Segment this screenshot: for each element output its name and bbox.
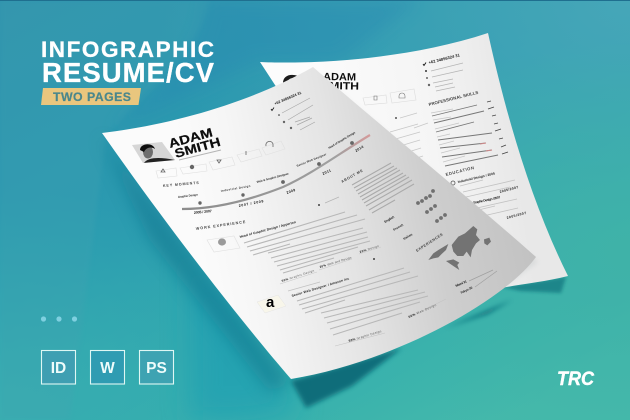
- amazon logo box: [257, 294, 286, 313]
- name heading: SMITH: [173, 135, 222, 161]
- title: INFOGRAPHIC: [41, 37, 214, 62]
- education entries: Industrial Design / 2005: [457, 171, 495, 184]
- job subtitle: [179, 150, 221, 160]
- skill chips: [280, 244, 381, 284]
- name heading: [167, 125, 222, 161]
- back sheet paper: [260, 33, 568, 288]
- world map: [428, 226, 491, 270]
- software icon: W: W: [100, 360, 115, 377]
- divider dot: [318, 204, 320, 206]
- back sheet icon boxes: [363, 89, 416, 105]
- education entries: [451, 171, 527, 220]
- language labels: French: [392, 223, 404, 232]
- timeline chart: 2009: [286, 188, 296, 195]
- date line: [288, 282, 320, 291]
- education heading: EDUCATION: [445, 165, 474, 177]
- brand logo: TRC: TRC: [557, 369, 594, 390]
- timeline chart: 2007 / 2009: [238, 199, 264, 208]
- contact details: +62 34856324 31: [274, 91, 302, 106]
- timeline chart: 2011: [322, 169, 332, 176]
- second divider dot: [373, 258, 375, 260]
- back resume sheet: [260, 33, 568, 288]
- software icon: PS: PS: [146, 360, 167, 377]
- skill chips: 20% Design: [359, 244, 380, 254]
- back sheet contact details: [423, 52, 463, 91]
- education entries: Graphic Design / 2007: [472, 195, 501, 205]
- language labels: [384, 215, 413, 241]
- experience locations: Tokyo 30: [460, 286, 473, 295]
- back sheet middle column: [390, 113, 428, 160]
- title: RESUME/CV: [42, 57, 215, 88]
- back sheet name: SMITH: [321, 80, 359, 93]
- description lines: [244, 212, 370, 273]
- language labels: Italian: [402, 232, 413, 241]
- skill chips: 50% Graphic Design: [281, 269, 315, 283]
- language rating dots: [416, 189, 447, 223]
- timeline chart: Web & Graphic Designer: [256, 171, 290, 184]
- pagination dots: [41, 316, 77, 322]
- back sheet photo: [283, 75, 298, 84]
- work experience heading: WORK EXPERIENCE: [196, 220, 246, 231]
- job one: apple: [207, 212, 381, 284]
- about me paragraph: [352, 163, 414, 213]
- skill chips: 50% Graphic Design: [348, 329, 382, 343]
- professional skills heading: PROFESSIONAL SKILLS: [428, 90, 479, 107]
- skill chips: [335, 299, 446, 346]
- amazon logo box: a: [266, 294, 275, 311]
- front resume sheet: [102, 67, 536, 379]
- ground shadow of sheets: [100, 135, 566, 408]
- software icon: W: [90, 350, 124, 384]
- timeline chart: [178, 130, 370, 215]
- badge: two pages: [41, 88, 141, 105]
- about me heading: ABOUT ME: [341, 168, 364, 184]
- timeline chart: Graphic Design: [178, 193, 198, 199]
- description lines: [297, 268, 428, 335]
- title: [41, 37, 215, 88]
- contact details: [271, 91, 315, 130]
- front sheet paper: [102, 67, 536, 379]
- education entries: 2005/2007: [506, 211, 527, 220]
- software icon: ID: ID: [51, 360, 66, 377]
- job two: amazon: [257, 268, 446, 346]
- job title: Senior Web Designer / Amazon inc: [291, 277, 350, 298]
- experience locations: [455, 270, 497, 295]
- profile photo: [132, 142, 175, 163]
- back sheet contact details: +62 34856324 31: [428, 52, 461, 65]
- experience locations: Miami 31: [455, 279, 468, 288]
- software icon: PS: [140, 350, 174, 384]
- badge: two pages: TWO PAGES: [53, 90, 131, 104]
- timeline chart: Senior Web Designer: [296, 152, 328, 168]
- skill chips: 20% Web and Design: [319, 255, 352, 269]
- name heading: ADAM: [167, 125, 214, 151]
- key moments heading: KEY MOMENTS: [163, 181, 199, 188]
- education entries: 2005/2007: [499, 185, 519, 194]
- timeline chart: Head of Graphic Design: [327, 130, 356, 150]
- timeline chart: Industrial Design: [220, 184, 251, 193]
- timeline chart: 2005 / 2007: [194, 209, 212, 215]
- back sheet name: ADAM: [323, 71, 356, 84]
- apple logo box: [207, 236, 240, 252]
- language labels: English: [384, 215, 395, 224]
- shadow of front sheet on back sheet: [316, 72, 538, 286]
- professional skills bars: [431, 101, 508, 166]
- skill chips: 50% Web Design: [408, 303, 437, 319]
- back sheet name: [321, 71, 359, 93]
- software icon: ID: [42, 350, 76, 384]
- timeline chart: 2014: [354, 145, 364, 153]
- icon boxes row: [156, 141, 285, 178]
- job title: Head of Graphic Design / Apperton: [239, 220, 296, 239]
- experiences heading: EXPERIENCES: [415, 232, 444, 253]
